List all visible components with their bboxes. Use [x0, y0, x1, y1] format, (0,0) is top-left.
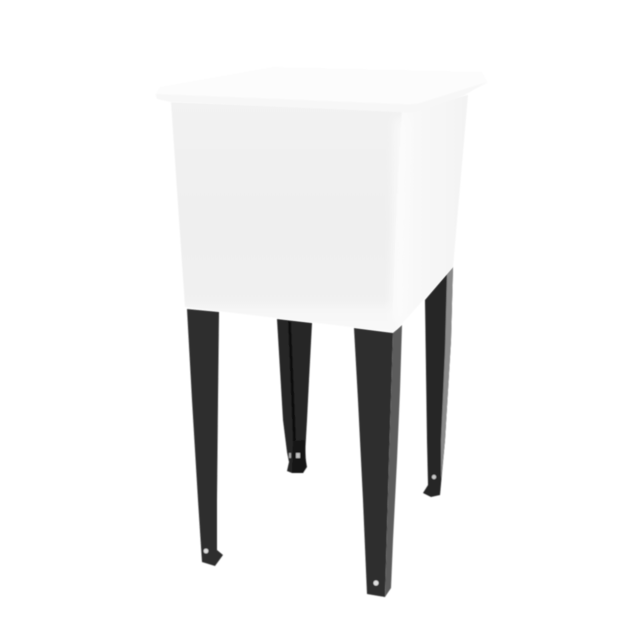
bolt: [204, 549, 208, 553]
tub body: [171, 95, 468, 332]
side bolt: [289, 453, 291, 458]
tub: rounded corner highlight: [392, 118, 408, 322]
bolt: [296, 453, 300, 458]
rim: [155, 67, 488, 112]
tub: side face: [388, 95, 468, 331]
leg: front right: [354, 325, 402, 597]
leg: front left: [187, 309, 223, 566]
bracket: [292, 440, 306, 473]
rim: front lip: [156, 82, 487, 112]
bolt: [432, 475, 436, 479]
rim: top surface: [155, 67, 488, 112]
leg: back right: [423, 267, 453, 497]
bolt: [373, 580, 379, 586]
leg: back middle: [277, 319, 312, 473]
tub: front face: [171, 102, 402, 332]
